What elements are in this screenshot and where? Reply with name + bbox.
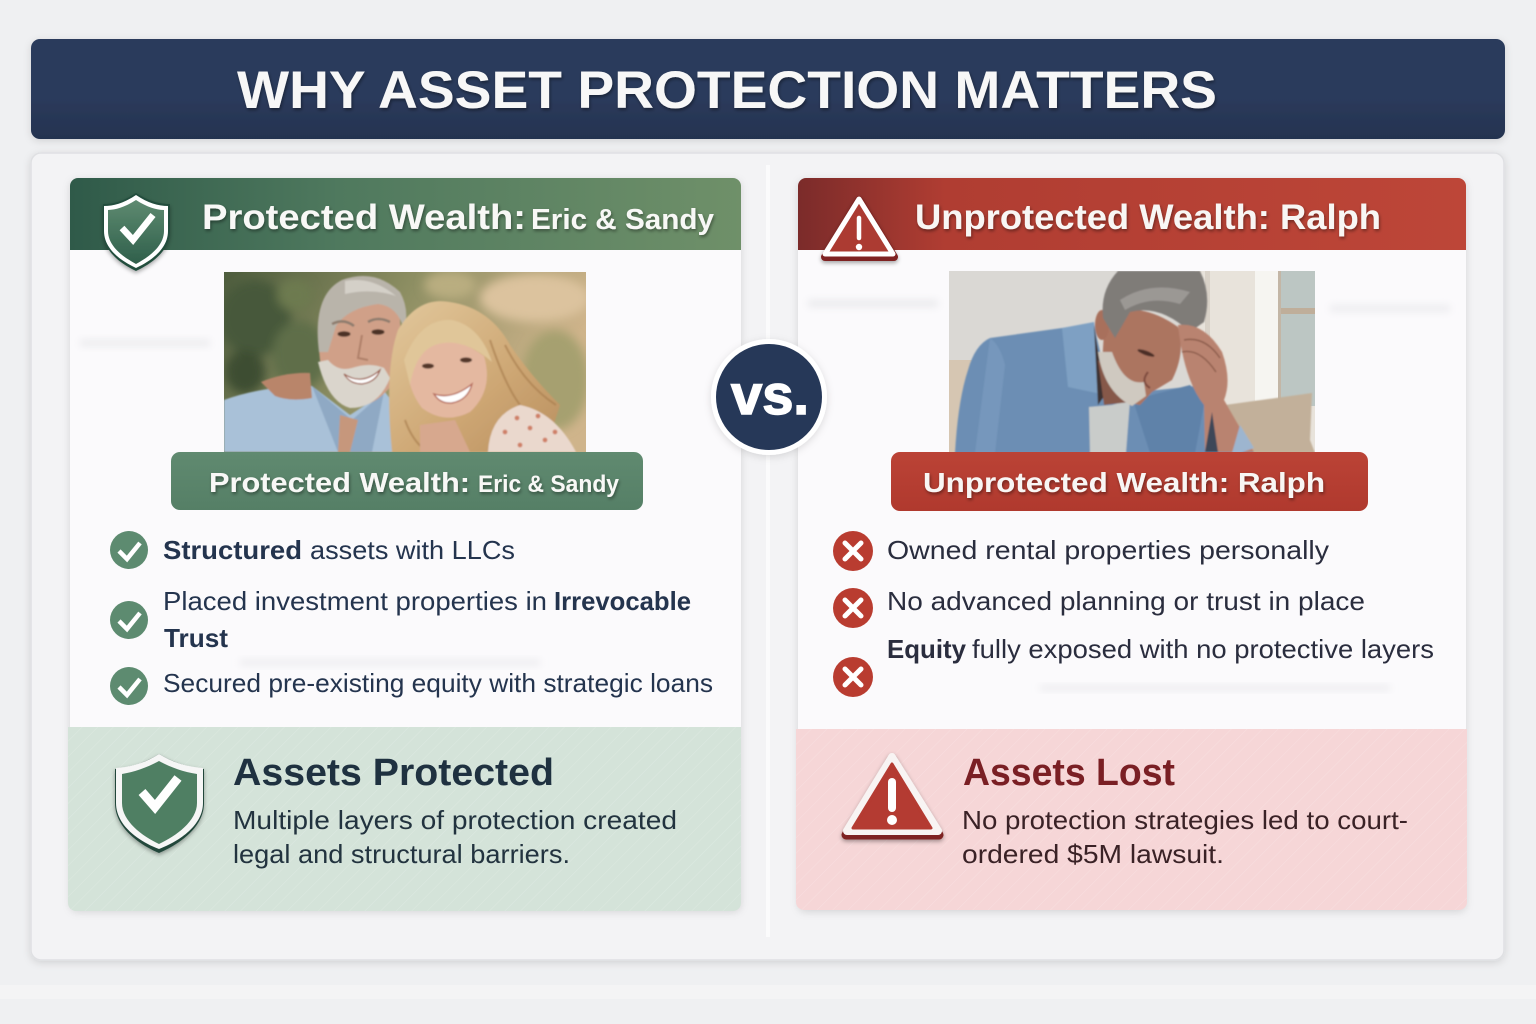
outcome text: protected bbox=[233, 752, 677, 869]
outcome text: protected: legal and structural barriers. bbox=[233, 839, 570, 869]
arm/hand bbox=[261, 373, 312, 400]
list item: structured assets: Structured bbox=[163, 535, 302, 565]
hand and forearm bbox=[1178, 325, 1254, 452]
header band: protected bbox=[70, 178, 741, 250]
list: missing protections bbox=[833, 531, 1434, 697]
woman's hair bbox=[389, 301, 560, 452]
list item: secured equity: Secured pre-existing equity with strategic loans bbox=[163, 668, 713, 698]
list item: owned personally bbox=[833, 531, 1329, 571]
header text: protected: Protected Wealth: bbox=[202, 198, 526, 237]
list item: irrevocable trust bbox=[110, 586, 691, 653]
header text: unprotected: Unprotected Wealth: Ralph bbox=[915, 198, 1381, 237]
outcome text: lost: Assets Lost bbox=[963, 752, 1175, 794]
list item: no planning: No advanced planning or trust in place bbox=[887, 586, 1365, 616]
list item: equity exposed: Equity bbox=[887, 634, 967, 664]
beard bbox=[1098, 352, 1146, 406]
photo: Ralph bbox=[949, 271, 1315, 453]
ear bbox=[1095, 310, 1109, 340]
icon: outcome warning triangle bbox=[846, 757, 939, 835]
list: protection steps bbox=[110, 531, 713, 705]
undershirt bbox=[1089, 400, 1130, 453]
list item: no planning bbox=[833, 586, 1365, 628]
title banner bbox=[31, 39, 1505, 139]
header band: unprotected bbox=[798, 178, 1466, 250]
face bbox=[1102, 310, 1181, 405]
outcome text: lost: No protection strategies led to court- bbox=[962, 805, 1408, 835]
icon: outcome shield bbox=[115, 754, 204, 853]
list item: equity exposed bbox=[833, 634, 1434, 697]
vs badge: vs. bbox=[731, 363, 809, 426]
vs badge bbox=[711, 339, 827, 455]
list item: structured assets bbox=[110, 531, 515, 569]
caption badge: protected bbox=[171, 452, 643, 510]
outcome text: protected: Assets Protected bbox=[233, 752, 554, 794]
caption badge: unprotected: Unprotected Wealth: Ralph bbox=[923, 467, 1325, 498]
woman's face bbox=[407, 339, 487, 418]
header text: protected: Eric & Sandy bbox=[531, 204, 714, 236]
icon: header warning triangle bbox=[825, 199, 894, 257]
hair bbox=[1103, 271, 1207, 338]
list item: irrevocable trust: Trust bbox=[164, 623, 228, 653]
list item: irrevocable trust: Placed investment properties in bbox=[163, 586, 547, 616]
outcome panel: assets protected bbox=[68, 727, 741, 911]
caption badge: unprotected bbox=[891, 452, 1368, 511]
panel: protected wealth bbox=[68, 178, 741, 911]
man's shirt bbox=[224, 386, 408, 452]
outcome text: protected: Multiple layers of protection created bbox=[233, 805, 677, 835]
caption badge: protected: Eric & Sandy bbox=[478, 471, 620, 498]
outcome text: lost: ordered $5M lawsuit. bbox=[962, 839, 1224, 869]
list item: irrevocable trust: Irrevocable bbox=[554, 586, 691, 616]
list item: structured assets: assets with LLCs bbox=[310, 535, 515, 565]
main comparison panel bbox=[31, 153, 1504, 960]
panel: unprotected wealth bbox=[796, 178, 1467, 910]
neck bbox=[1098, 360, 1130, 405]
outcome text: lost bbox=[962, 752, 1408, 869]
icon: header shield bbox=[103, 193, 170, 271]
photo: Eric and Sandy bbox=[219, 271, 590, 452]
title: WHY ASSET PROTECTION MATTERS bbox=[237, 61, 1217, 120]
outcome panel: assets lost bbox=[796, 729, 1467, 910]
list item: equity exposed: fully exposed with no protective layers bbox=[972, 634, 1434, 664]
floral blouse bbox=[488, 405, 576, 452]
man's neck and face bbox=[318, 303, 401, 402]
shirt bbox=[955, 325, 1254, 453]
list item: owned personally: Owned rental properties personally bbox=[887, 535, 1329, 565]
caption badge: protected: Protected Wealth: bbox=[209, 467, 470, 498]
cushion bbox=[1225, 393, 1315, 453]
